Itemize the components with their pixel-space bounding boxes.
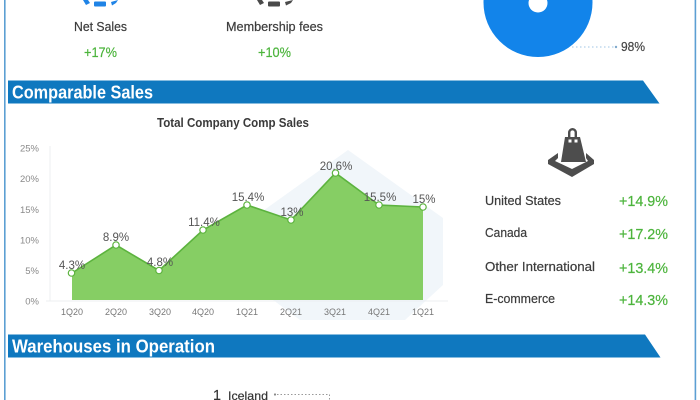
row: united states: +14.9% <box>619 194 668 210</box>
row: e-commerce: +14.3% <box>619 293 668 309</box>
row: canada: Canada <box>485 226 527 240</box>
chart title: Total Company Comp Sales <box>157 116 309 130</box>
pie chart: 98% share <box>484 0 645 57</box>
heading banner: comparable sales: Comparable Sales <box>12 82 153 102</box>
icon: shopping bag on platform <box>548 128 594 177</box>
y axis labels <box>20 144 40 308</box>
data labels: 15.4% <box>232 192 264 204</box>
y axis labels: 15% <box>20 205 40 216</box>
data point markers <box>68 170 426 276</box>
value: net sales change: +17% <box>84 45 117 60</box>
row: united states: United States <box>485 194 561 208</box>
heading banner: comparable sales <box>8 80 660 104</box>
area series <box>72 173 423 300</box>
x axis labels: 3Q21 <box>324 307 346 317</box>
x axis labels: 2Q20 <box>105 307 127 317</box>
data labels: 15% <box>412 194 436 206</box>
area chart: total company comp sales <box>20 144 448 320</box>
data labels: 11.4% <box>188 217 220 229</box>
data labels: 8.9% <box>103 232 129 244</box>
row: other international: Other International <box>485 260 595 274</box>
pie value label: 98% <box>621 39 645 54</box>
heading banner: warehouses in operation <box>8 334 660 358</box>
y axis labels: 25% <box>20 144 40 154</box>
icon: membership ring fragment <box>257 0 293 6</box>
x axis labels: 2Q21 <box>280 307 302 317</box>
data labels <box>59 161 436 272</box>
data labels: 13% <box>280 207 304 219</box>
row: other international: +13.4% <box>619 261 668 277</box>
panel: regional comp sales <box>485 194 668 309</box>
data labels: 15.5% <box>364 192 396 204</box>
panel: membership fees <box>226 0 323 60</box>
x axis labels: 4Q20 <box>192 307 214 317</box>
y axis labels: 20% <box>20 174 40 185</box>
row: canada <box>485 226 668 243</box>
x axis labels <box>61 307 434 317</box>
x axis labels: 1Q21 <box>236 307 258 317</box>
heading banner: warehouses in operation: Warehouses in Operation <box>12 336 215 356</box>
row: other international <box>485 260 668 277</box>
y axis labels: 0% <box>25 296 40 308</box>
data labels: 20.6% <box>320 161 352 173</box>
row: e-commerce: E-commerce <box>485 292 555 306</box>
y axis labels: 10% <box>20 236 40 246</box>
label: net sales: Net Sales <box>74 20 127 34</box>
row: e-commerce <box>485 292 668 309</box>
panel: net sales <box>74 0 127 60</box>
data labels: 4.3% <box>59 260 85 272</box>
value: membership fees change: +10% <box>258 45 291 60</box>
icon: net sales ring fragment <box>83 0 118 6</box>
map callout: iceland <box>213 387 330 400</box>
label: membership fees: Membership fees <box>226 20 323 34</box>
row: canada: +17.2% <box>619 227 668 243</box>
x axis labels: 1Q21 <box>412 307 434 317</box>
y axis labels: 5% <box>25 266 40 277</box>
x axis labels: 1Q20 <box>61 307 83 317</box>
x axis labels: 4Q21 <box>368 307 390 317</box>
data labels: 4.8% <box>147 257 173 269</box>
row: united states <box>485 194 668 210</box>
x axis labels: 3Q20 <box>149 307 171 317</box>
